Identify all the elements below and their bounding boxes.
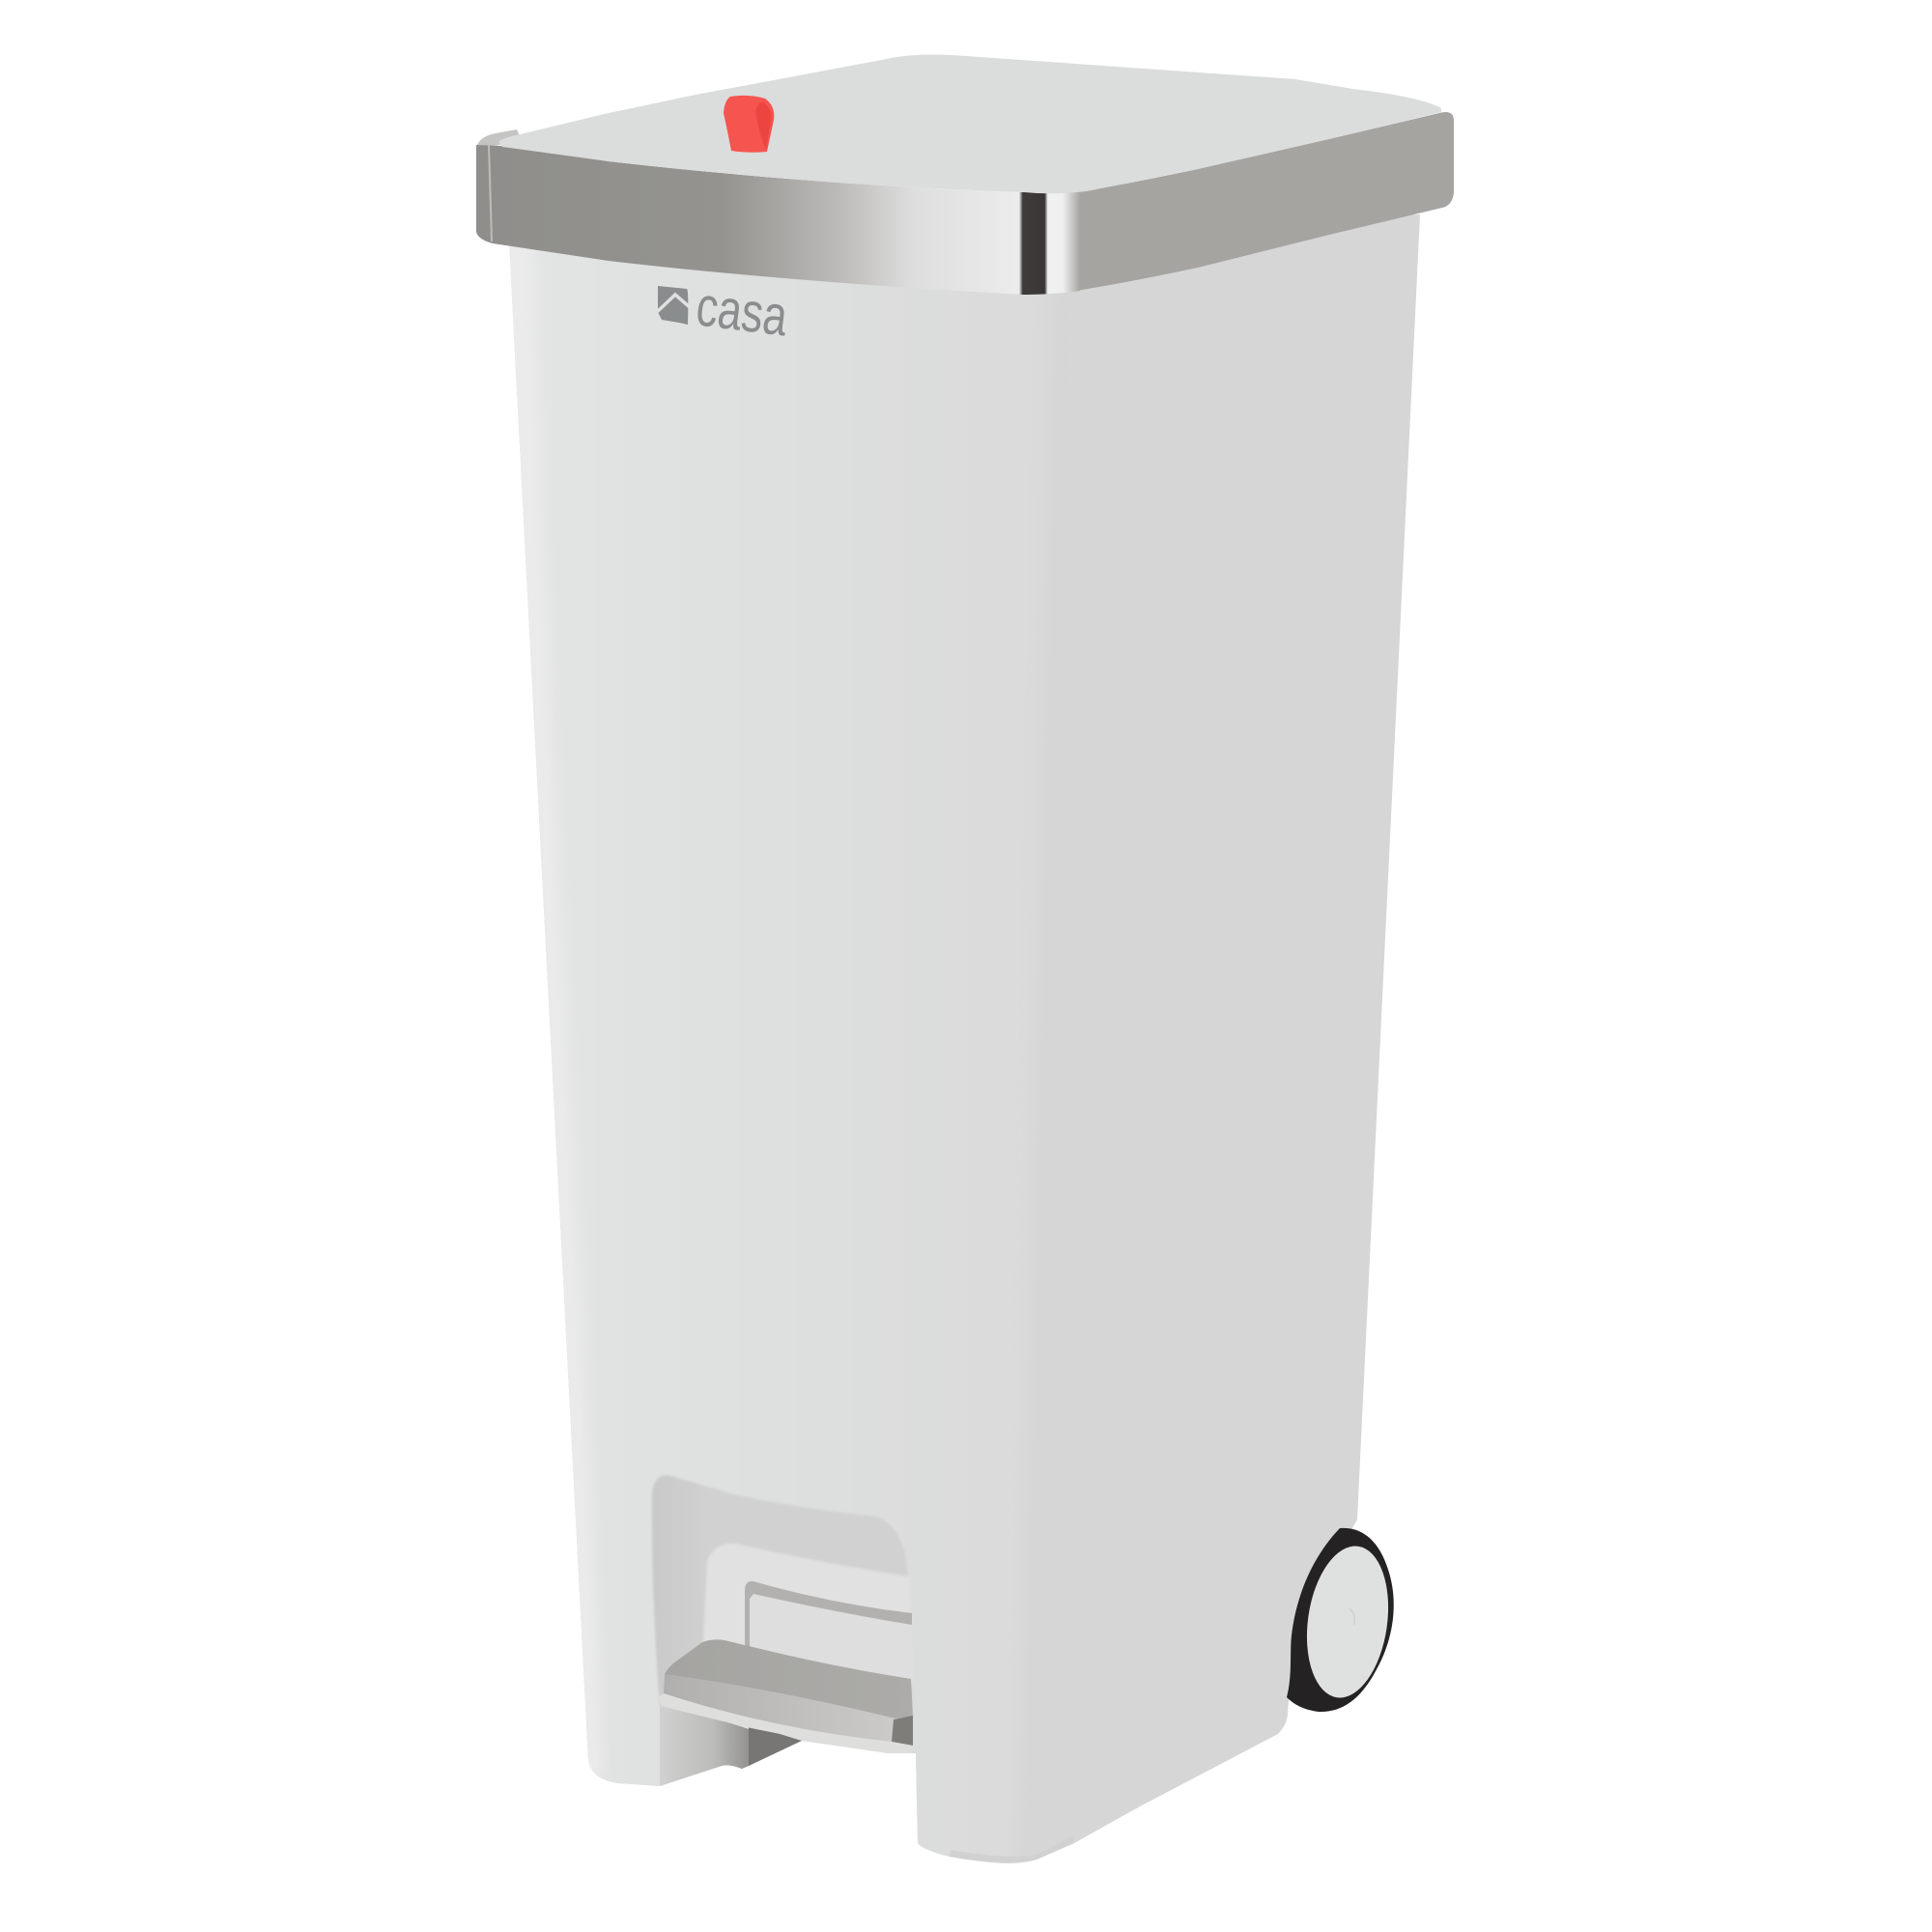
wheel (1287, 1528, 1398, 1712)
product illustration: pedal bin (476, 54, 1454, 1863)
pedal end cap (892, 1716, 913, 1746)
pedal front face (664, 1674, 895, 1742)
lid top plate (498, 55, 1441, 193)
red pull tab (724, 96, 774, 153)
logo house mark (657, 286, 690, 325)
metal band corner (1019, 191, 1080, 295)
dark gap under pedal (749, 1724, 802, 1766)
logo wordmark: casa (693, 274, 791, 348)
casa logo (657, 274, 791, 348)
recess shaded cavity (652, 1475, 913, 1719)
tyre (1287, 1528, 1394, 1712)
inner pillar (702, 1544, 913, 1686)
body silhouette and right side (509, 214, 1420, 1863)
rim (1297, 1541, 1398, 1703)
pedal recess (652, 1475, 913, 1786)
pedal top surface (665, 1639, 913, 1719)
body front face (510, 245, 847, 1786)
metal band front (476, 145, 1024, 295)
foot pedal (659, 1639, 913, 1753)
pedal lip (659, 1693, 913, 1753)
foot notch (950, 1835, 1074, 1862)
metal band right side (1070, 112, 1454, 292)
band left highlight (489, 145, 492, 242)
bin body (483, 214, 1420, 1874)
leg under pedal (660, 1700, 749, 1786)
lid (476, 55, 1454, 295)
upper pedal plate (745, 1581, 912, 1686)
lid rear rim (476, 129, 522, 147)
